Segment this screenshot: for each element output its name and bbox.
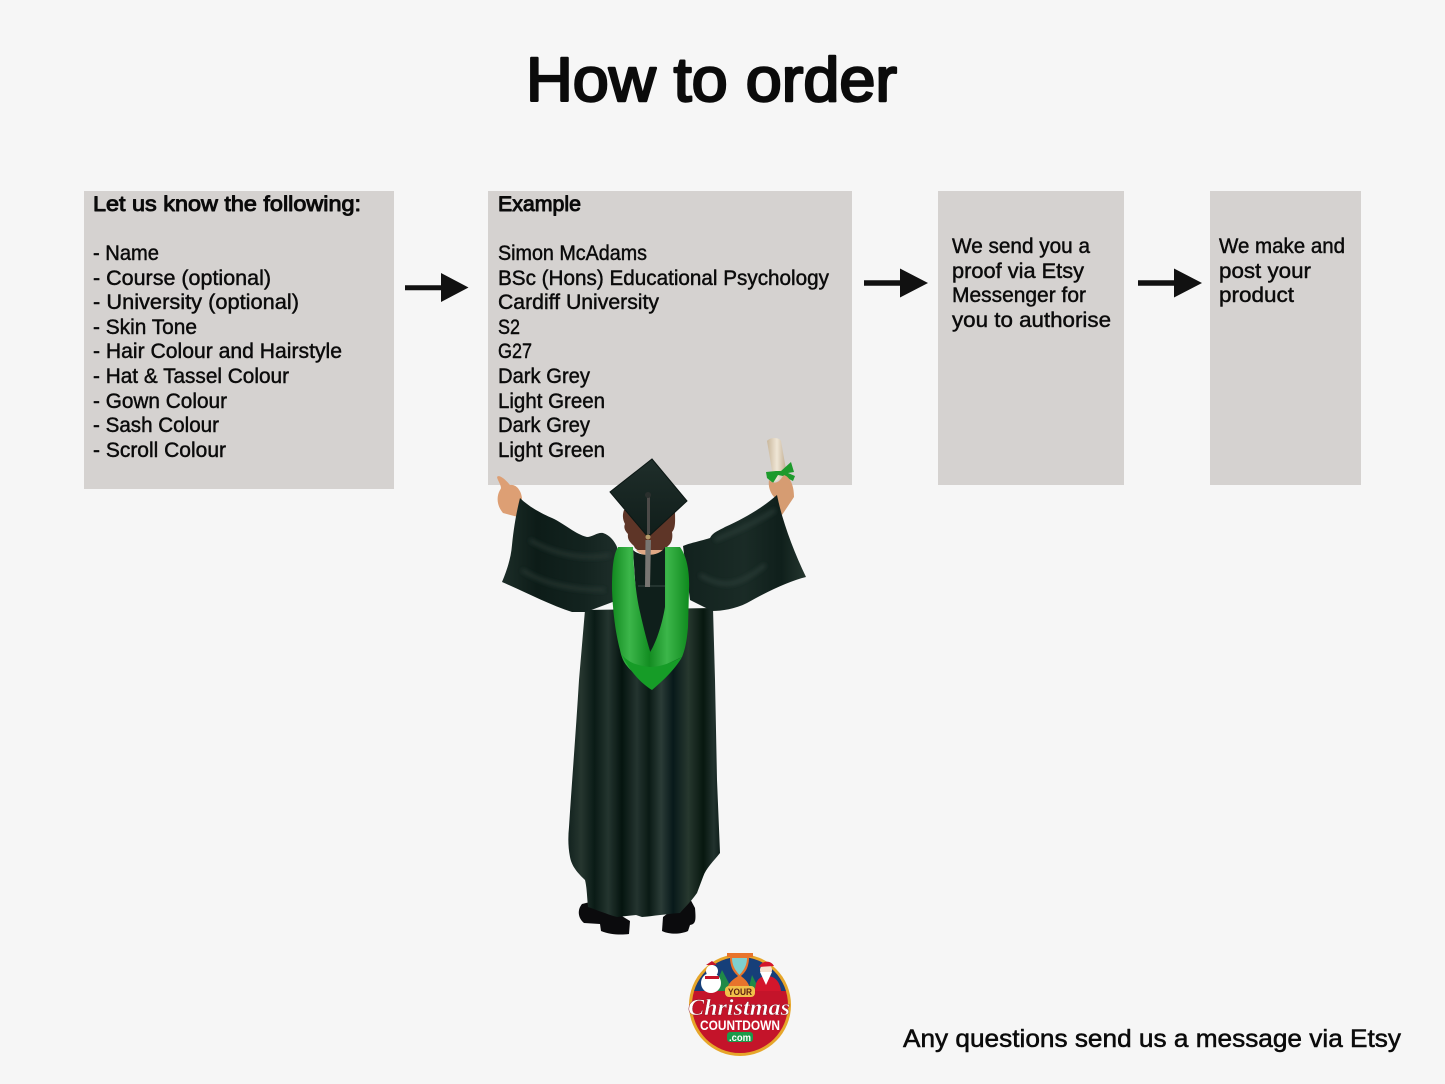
title: How to order [526,46,897,115]
example order lines: Dark Grey [498,414,590,437]
make and post text: post your [1219,260,1311,283]
list of details: - Name [93,242,159,265]
example order lines: Light Green [498,390,605,413]
gown collar back [633,547,670,655]
yoke seam [638,585,665,587]
hair and neck [623,510,675,556]
right sleeve [683,495,806,611]
list of details: - Sash Colour [93,414,219,437]
logo: Your Christmas Countdown [688,953,791,1056]
list of details: - Course (optional) [93,267,271,290]
left hand thumbs up [497,476,522,517]
gown body [568,608,720,917]
mortarboard cap [610,459,687,537]
list of details: - Hair Colour and Hairstyle [93,340,342,363]
scroll ribbon [766,462,795,483]
panel: proof [938,191,1124,485]
logo wordmark: Christmas [688,995,790,1020]
panel heading: let us know: Let us know the following: [93,193,361,216]
arrow: example to proof [864,268,928,298]
logo scene [690,955,790,1055]
left strap [612,547,651,672]
left sleeve fold highlights [522,540,610,590]
panel: make and post [1210,191,1361,485]
example order lines: Simon McAdams [498,242,647,265]
panel heading: example: Example [498,193,581,216]
example order lines: Light Green [498,439,605,462]
left sleeve [502,498,618,612]
logo wordmark [688,986,790,1044]
example order lines: BSc (Hons) Educational Psychology [498,267,829,290]
proof text: Messenger for [952,284,1086,307]
snowman [701,961,721,993]
sash hood [612,547,689,690]
footer message: Any questions send us a message via Etsy [903,1025,1402,1053]
tassel [645,492,651,587]
example order lines [498,242,829,462]
list of details: - Scroll Colour [93,439,226,462]
arrow: proof to product [1138,268,1202,298]
make and post text: We make and [1219,235,1345,258]
proof text: We send you a [952,235,1090,258]
santa [755,962,781,991]
example order lines: Cardiff University [498,291,659,314]
hourglass [727,953,753,991]
proof text: proof via Etsy [952,260,1085,283]
list of details: - University (optional) [93,291,299,314]
example order lines: Dark Grey [498,365,590,388]
right sleeve fold highlights [700,510,775,584]
sash lower fold [622,655,682,690]
logo wordmark: YOUR [728,987,752,997]
make and post text [1219,235,1345,307]
right hand holding scroll [769,475,794,515]
list of details: - Skin Tone [93,316,197,339]
logo wordmark: .com [729,1033,751,1044]
list of details [93,242,342,462]
right strap [649,547,689,672]
scroll [766,438,795,483]
illustration: graduate seen from behind [497,438,806,935]
arrow: details to example [405,273,468,302]
logo wordmark: COUNTDOWN [700,1017,780,1033]
proof text [952,235,1111,332]
proof text: you to authorise [952,309,1111,332]
list of details: - Hat & Tassel Colour [93,365,289,388]
example order lines: S2 [498,316,520,339]
panel: details to provide [84,191,394,489]
panel: example [488,191,852,485]
make and post text: product [1219,284,1294,307]
example order lines: G27 [498,340,532,363]
list of details: - Gown Colour [93,390,227,413]
shoes [579,895,695,935]
